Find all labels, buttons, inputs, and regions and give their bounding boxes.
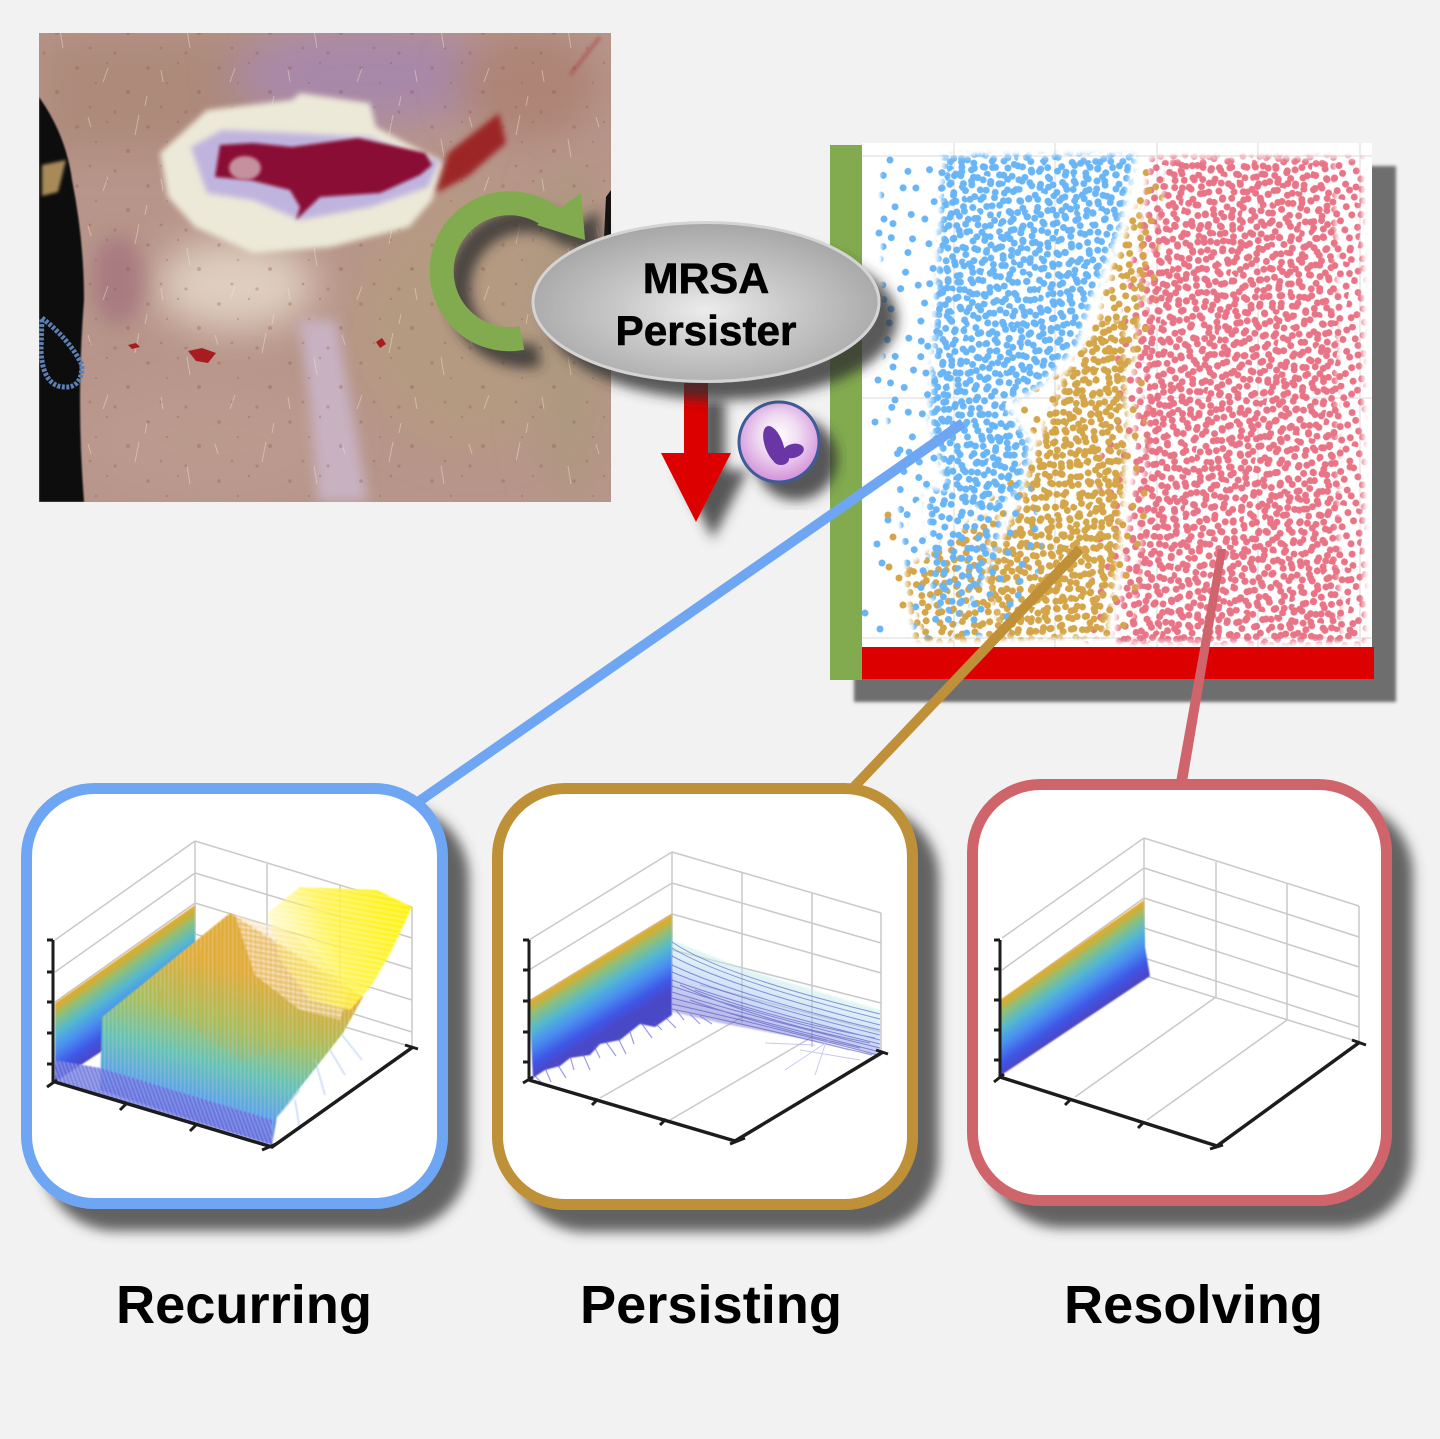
surface: flat left band [55, 905, 195, 1082]
label: Persisting: Persisting [580, 1275, 842, 1335]
connector: persisting [853, 549, 1080, 788]
label: MRSA: MRSA [643, 255, 769, 303]
arrow: red downward [661, 383, 731, 522]
panel: persisting plot [498, 788, 912, 1204]
walls and grid [529, 852, 881, 1120]
walls and grid [55, 841, 412, 1047]
axes [529, 1052, 883, 1141]
label: Recurring: Recurring [116, 1275, 372, 1335]
walls and grid [1002, 838, 1359, 1120]
panel shadow [854, 166, 1396, 702]
scatter points [862, 143, 1372, 650]
connector: recurring [418, 423, 963, 802]
tail curves [672, 942, 880, 1055]
panel: recurring plot [26, 788, 442, 1204]
icon: neutrophil cell [739, 402, 819, 482]
red x-axis bar [862, 647, 1374, 679]
floor traces [765, 1040, 860, 1075]
surface: tail [672, 940, 880, 1057]
label: Persister: Persister [616, 307, 796, 354]
axes [55, 1047, 413, 1147]
band lower fringe [535, 1010, 712, 1084]
connector: resolving [1176, 549, 1226, 782]
arrow: green recurring loop [442, 193, 585, 339]
surface: main slope [55, 887, 412, 1145]
scatter plot panel [830, 143, 1396, 702]
label: Resolving: Resolving [1064, 1275, 1323, 1335]
panel: resolving plot [972, 784, 1386, 1200]
green y-axis bar [830, 145, 862, 680]
surface: band [1000, 900, 1150, 1076]
surface: left band [529, 914, 672, 1078]
photo: wound on leg [39, 25, 611, 502]
MRSA Persister ellipse [533, 222, 879, 382]
plot background [862, 143, 1372, 650]
axes [1000, 1042, 1360, 1146]
